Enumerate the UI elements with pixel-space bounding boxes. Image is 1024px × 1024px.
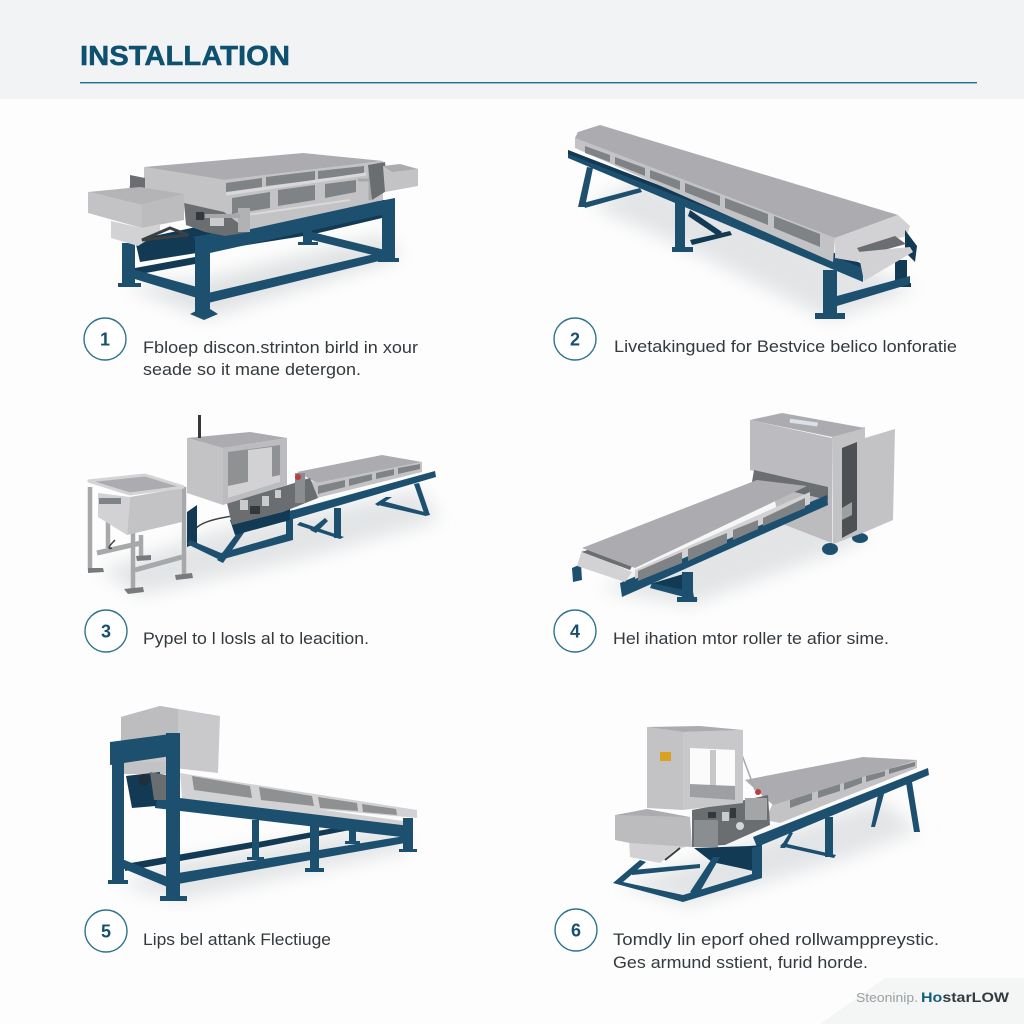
machine illustration 3 (87, 415, 440, 595)
number badge 4 (554, 610, 596, 652)
number badge 4: 4 (570, 622, 580, 642)
step 6 text: Ges armund sstient, furid horde. (613, 953, 868, 972)
machine illustration 2 (568, 125, 917, 320)
machine illustration 4 (572, 413, 895, 605)
panel: step 1 (84, 153, 418, 379)
panel: step 5 (85, 706, 417, 952)
step 1 text: Fbloep discon.strinton birld in xour (143, 338, 418, 357)
panel: step 3 (85, 415, 440, 652)
number badge 6: 6 (571, 920, 581, 940)
step 4 text: Hel ihation mtor roller te afior sime. (613, 629, 889, 648)
number badge 2 (554, 318, 596, 360)
title: INSTALLATION (80, 40, 290, 71)
step 1 text (143, 338, 418, 379)
machine illustration 1 (88, 153, 418, 320)
step 2 text: Livetakingued for Bestvice belico lonforatie (614, 337, 957, 356)
header rule (80, 82, 977, 83)
panel: step 2 (554, 125, 957, 360)
footer brand name: HostarLOW (921, 990, 1009, 1005)
step 3 text: Pypel to l losls al to leacition. (143, 629, 369, 648)
number badge 6 (555, 909, 597, 951)
step 5 text: Lips bel attank Flectiuge (143, 930, 331, 949)
number badge 5: 5 (101, 922, 111, 942)
panel: step 4 (554, 413, 895, 652)
machine illustration 6 (613, 726, 929, 905)
number badge 5 (85, 910, 127, 952)
number badge 1: 1 (100, 330, 110, 350)
number badge 3 (85, 610, 127, 652)
number badge 1 (84, 318, 126, 360)
header band (0, 0, 1024, 99)
panel: step 6 (555, 726, 939, 972)
step 1 text: seade so it mane detergon. (143, 360, 361, 379)
number badge 2: 2 (570, 330, 580, 350)
footer brand corner (820, 978, 1024, 1024)
machine illustration 5 (108, 706, 417, 901)
footer caption: Steoninip. (856, 991, 918, 1005)
step 6 text (613, 930, 939, 972)
number badge 3: 3 (101, 622, 111, 642)
step 6 text: Tomdly lin eporf ohed rollwamppreystic. (613, 930, 939, 949)
